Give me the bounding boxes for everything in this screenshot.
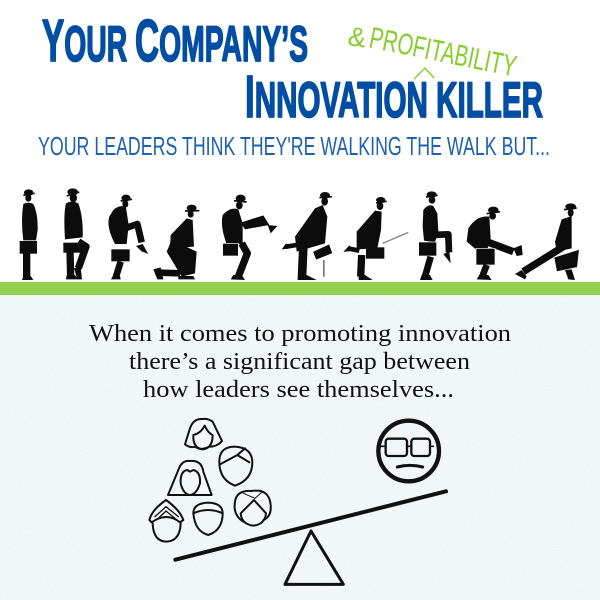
- boss face with glasses: [377, 421, 439, 481]
- face: curly parted hair: [235, 491, 271, 526]
- figure 7: [343, 197, 408, 280]
- seesaw beam: [175, 491, 446, 560]
- figure 3: [108, 195, 148, 279]
- figure 4: [153, 205, 199, 279]
- employee faces group: [149, 419, 271, 542]
- face: short flat hair: [193, 503, 223, 535]
- figure 5: [222, 195, 277, 280]
- figure 1: [19, 189, 38, 280]
- intro text: how leaders see themselves...: [143, 376, 454, 403]
- silly walk silhouettes, left group: [19, 188, 277, 280]
- green divider bar: [0, 282, 600, 295]
- figure 6: [282, 192, 333, 280]
- figure 9: [467, 207, 523, 280]
- title line 1: YOUR COMPANY’S: [42, 8, 308, 74]
- face: side parted hair: [219, 447, 252, 486]
- face: wrapped hair: [149, 500, 183, 542]
- figure 8: [419, 191, 451, 280]
- caret: [414, 68, 434, 79]
- profitability: PROFITABILITY: [367, 22, 519, 84]
- seesaw illustration: [149, 419, 446, 584]
- intro text: there’s a significant gap between: [129, 348, 470, 375]
- intro text: [89, 320, 511, 403]
- intro text: When it comes to promoting innovation: [89, 320, 511, 347]
- figure 2: [63, 188, 86, 279]
- face: long hair woman top: [185, 419, 222, 449]
- lower textured background panel: [0, 295, 600, 600]
- silly walk silhouettes, right group: [282, 191, 579, 280]
- figure 10: [515, 203, 579, 280]
- ampersand: &: [346, 21, 368, 53]
- handwritten insertion: and profitability: [346, 21, 519, 84]
- triangle fulcrum: [285, 531, 343, 584]
- face: long straight hair: [168, 461, 212, 495]
